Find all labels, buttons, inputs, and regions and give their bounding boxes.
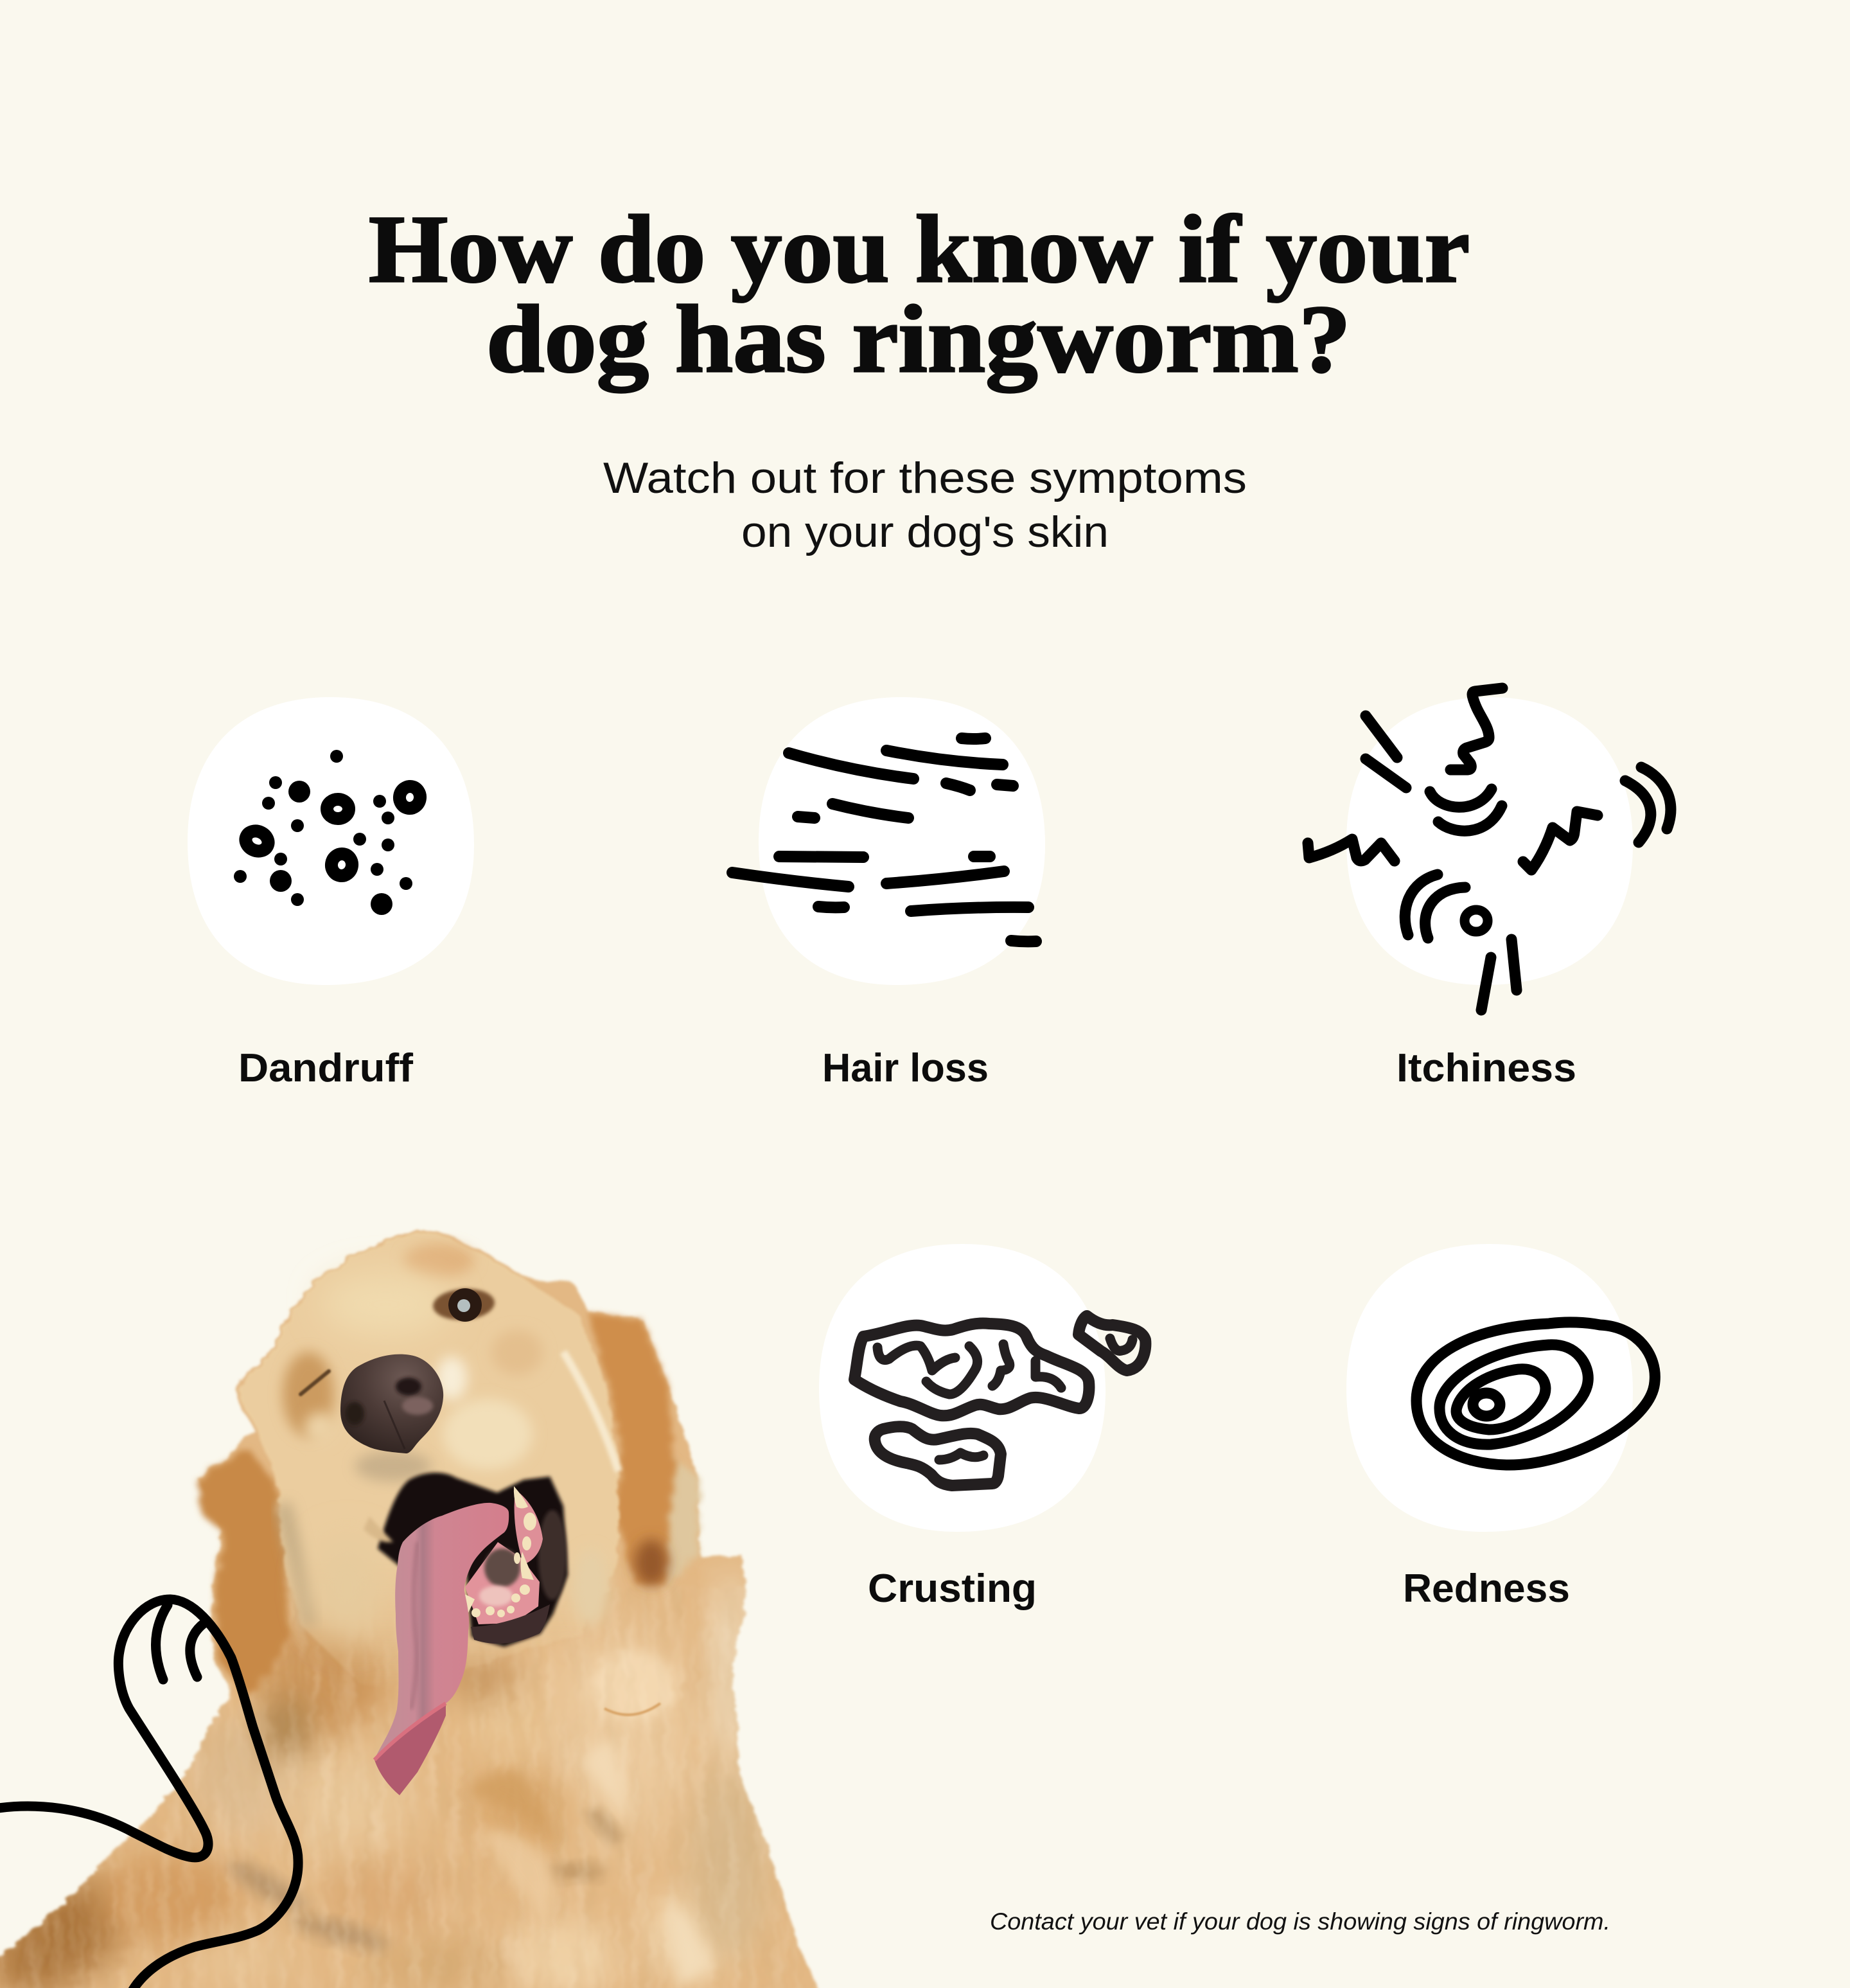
icon: hair loss strokes xyxy=(732,697,1045,985)
lower gum and inner mouth xyxy=(465,1542,540,1624)
dog body and chest fur xyxy=(0,1221,861,1988)
title xyxy=(369,196,1470,393)
open eye xyxy=(432,1287,496,1322)
icon: dandruff spots on skin xyxy=(188,697,474,985)
head xyxy=(239,1232,619,1696)
tongue underside tip xyxy=(374,1703,446,1795)
left ear xyxy=(199,1449,289,1696)
paw outline xyxy=(0,1599,298,1988)
closed eye xyxy=(301,1371,329,1394)
label: redness: Redness xyxy=(1403,1566,1570,1611)
lower-jaw fur xyxy=(538,1510,567,1600)
upper lip jowl xyxy=(364,1516,393,1542)
title: dog has ringworm? xyxy=(486,286,1351,393)
icon: crusted skin patches xyxy=(819,1244,1145,1532)
symptom: itchiness xyxy=(1308,688,1671,1090)
label: dandruff: Dandruff xyxy=(238,1046,413,1090)
symptom: crusting xyxy=(819,1244,1145,1611)
right ear xyxy=(589,1313,699,1588)
footnote: Contact your vet if your dog is showing signs of ringworm. xyxy=(990,1908,1610,1935)
teeth xyxy=(446,1486,536,1617)
symptom: hair loss xyxy=(732,697,1045,1090)
forehead and cheek markings xyxy=(403,1244,474,1277)
symptom: dandruff xyxy=(188,697,474,1090)
icon: itch marks xyxy=(1308,688,1671,1010)
golden retriever illustration xyxy=(0,1221,861,1988)
title: How do you know if your xyxy=(369,196,1470,303)
chest fur locks xyxy=(465,1703,713,1988)
label: hair loss: Hair loss xyxy=(822,1046,989,1090)
lower lip xyxy=(471,1604,550,1644)
upper gum xyxy=(515,1489,543,1565)
symptom: redness xyxy=(1346,1244,1655,1611)
subtitle: Watch out for these symptoms xyxy=(603,454,1247,502)
subtitle xyxy=(603,454,1247,556)
icon: concentric rings of redness xyxy=(1346,1244,1655,1532)
open mouth xyxy=(364,1473,568,1647)
label: itchiness: Itchiness xyxy=(1396,1046,1576,1090)
tongue xyxy=(374,1503,509,1795)
subtitle: on your dog's skin xyxy=(741,508,1109,556)
nose xyxy=(340,1354,443,1453)
label: crusting: Crusting xyxy=(868,1566,1037,1611)
